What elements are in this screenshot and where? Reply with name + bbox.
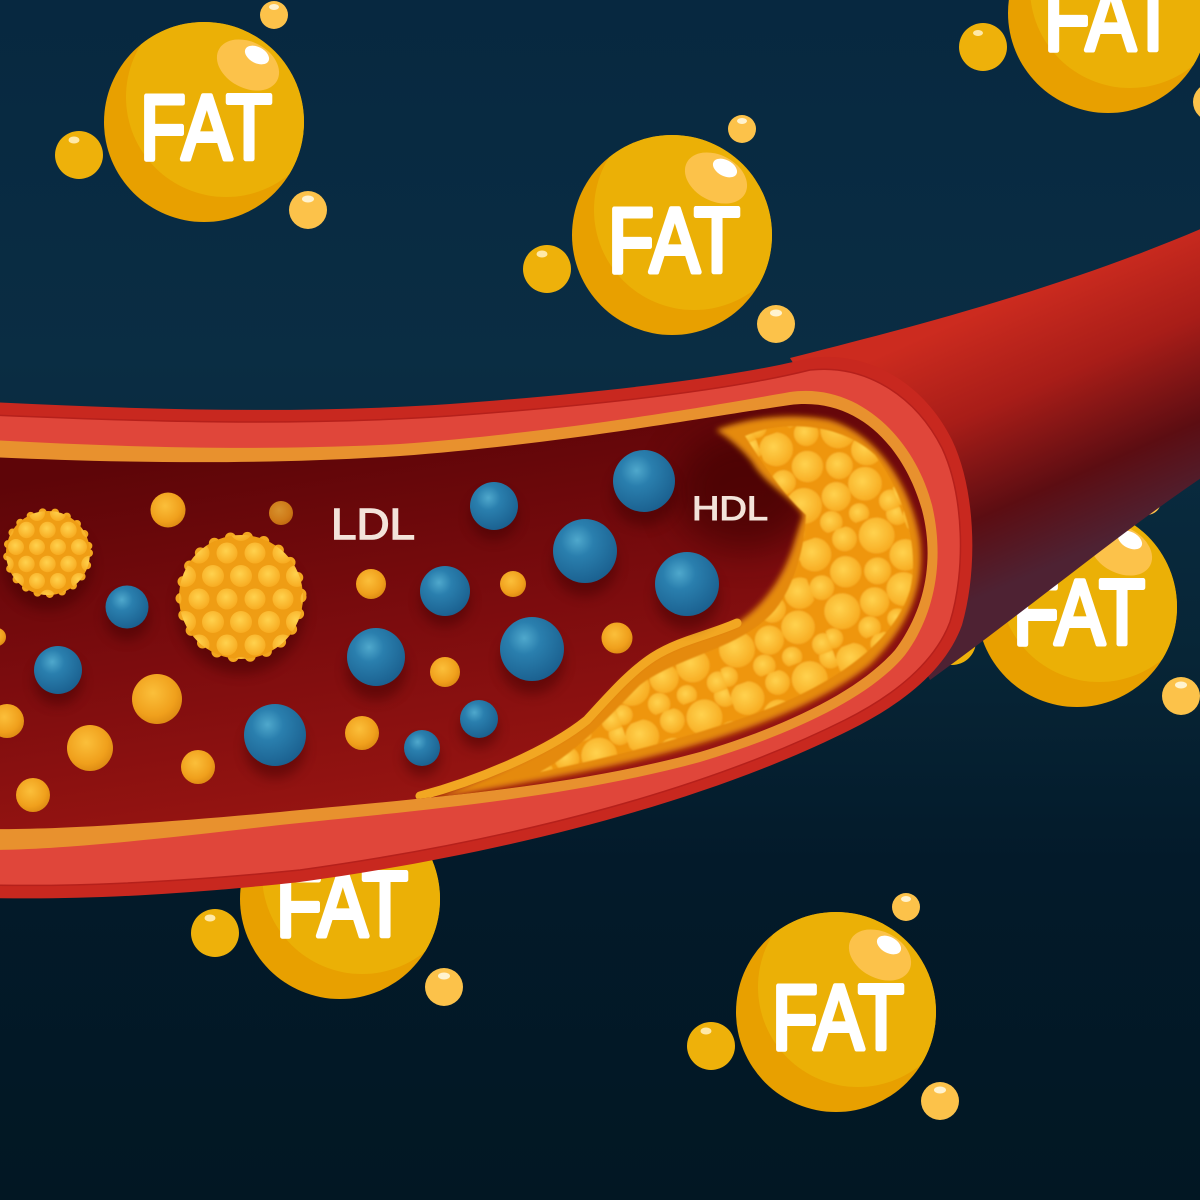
lumen — [0, 404, 928, 829]
plaque base — [430, 416, 921, 800]
fat bubble right, behind vessel — [950, 507, 1200, 715]
fat bubble top centre — [523, 110, 795, 343]
blue HDL particles — [34, 450, 719, 766]
fat bubble top left: FAT — [140, 77, 272, 179]
artery cut section: muscle layer — [0, 369, 960, 885]
dark shadow in the narrowed channel — [675, 430, 815, 550]
artery — [0, 225, 1200, 898]
fat bubble bottom right: FAT — [772, 967, 904, 1069]
label LDL: LDL — [331, 500, 415, 549]
label HDL: HDL — [692, 490, 768, 528]
orange LDL particles — [0, 492, 632, 812]
artery cut section: outer layer — [0, 357, 972, 898]
plaque lumps — [540, 426, 913, 772]
fat bubble top centre: FAT — [608, 190, 740, 292]
fat bubble lower left, behind vessel: FAT — [276, 854, 408, 956]
fat bubble bottom right — [687, 887, 959, 1120]
fat bubble right, behind vessel: FAT — [1013, 562, 1145, 664]
artery exterior wall — [790, 225, 1200, 680]
fat bubble top left — [55, 0, 327, 229]
plaque lip — [420, 623, 737, 796]
shadows under particles — [4, 462, 719, 778]
artery cut section: orange layer — [0, 391, 938, 850]
fat bubble top right — [959, 0, 1200, 121]
plaque deposit — [420, 416, 921, 800]
small LDL cluster — [6, 511, 90, 595]
fat bubble lower left, behind vessel — [191, 860, 463, 1006]
large LDL cluster — [179, 535, 303, 659]
